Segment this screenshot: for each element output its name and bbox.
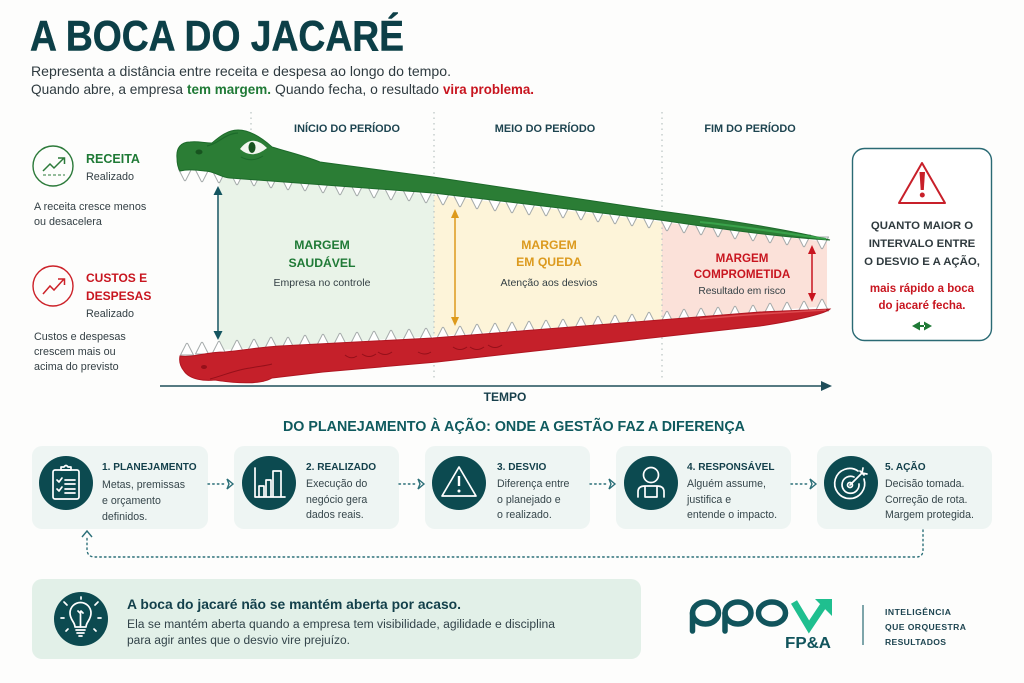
subtitle: vira problema. <box>443 81 534 97</box>
period headers: INÍCIO DO PERÍODO <box>294 122 400 135</box>
zone: margem saudável background <box>219 176 434 350</box>
chart: boca do jacaré <box>160 112 832 404</box>
period dividers <box>251 112 662 380</box>
step 5: ação: Correção de rota. <box>885 494 967 506</box>
icon: person <box>638 468 664 497</box>
label: margem comprometida: MARGEM <box>716 252 768 265</box>
legend: custos e despesas <box>33 266 151 373</box>
panel: takeaway: para agir antes que o desvio vire prejuízo. <box>127 635 350 647</box>
tagline: QUE ORQUESTRA <box>885 622 966 632</box>
legend: custos e despesas: CUSTOS E <box>86 271 147 285</box>
step 2: realizado: 2. REALIZADO <box>306 462 376 473</box>
callout: warning: do jacaré fecha. <box>879 300 965 312</box>
icon: bar chart <box>255 468 285 497</box>
zone: margem em queda background <box>434 195 662 336</box>
step 3: desvio: 3. DESVIO <box>497 462 547 473</box>
subtitle: tem margem. <box>187 81 271 97</box>
legend: receita <box>33 146 147 228</box>
label: margem saudável: SAUDÁVEL <box>288 255 356 270</box>
arrow: feedback loop from ação to planejamento <box>82 530 923 557</box>
tagline: INTELIGÊNCIA <box>885 606 951 617</box>
arrow: step 1 to 2 <box>208 479 233 489</box>
legend: receita: A receita cresce menos <box>34 201 147 213</box>
legend: receita: Realizado <box>86 171 134 183</box>
step 5: ação: Decisão tomada. <box>885 478 964 490</box>
legend: custos e despesas: DESPESAS <box>86 289 151 303</box>
subtitle: Quando fecha, o resultado <box>275 81 439 97</box>
upper jaw: green crocodile head <box>177 130 830 240</box>
step 4: responsável: 4. RESPONSÁVEL <box>687 460 775 473</box>
panel: takeaway <box>32 579 641 659</box>
label: margem em queda <box>501 238 597 289</box>
step 1: planejamento: Metas, premissas <box>102 479 185 491</box>
step 1: planejamento <box>32 446 208 529</box>
label: margem saudável: MARGEM <box>294 238 350 252</box>
time axis: TEMPO <box>484 390 526 404</box>
label: margem comprometida <box>694 252 791 297</box>
arrow: step 4 to 5 <box>791 479 816 489</box>
step 2: realizado: negócio gera <box>306 494 367 506</box>
arrow: margem comprometida gap <box>808 245 816 302</box>
callout: warning: QUANTO MAIOR O <box>871 220 973 232</box>
icon: converging arrows <box>912 322 932 330</box>
step 3: desvio: o planejado e <box>497 494 561 506</box>
arrow: margem em queda gap <box>451 209 459 326</box>
step 2: realizado <box>234 446 399 529</box>
callout: warning: O DESVIO E A AÇÃO, <box>864 255 980 268</box>
title: A BOCA DO JACARÉ <box>30 12 404 60</box>
step 1: planejamento: 1. PLANEJAMENTO <box>102 462 197 473</box>
label: margem saudável: Empresa no controle <box>274 277 371 289</box>
tagline: RESULTADOS <box>885 637 946 647</box>
step 2: realizado: Execução do <box>306 478 367 490</box>
label: margem comprometida: Resultado em risco <box>698 286 786 297</box>
subtitle: Quando abre, a empresa <box>31 81 183 97</box>
lower teeth <box>180 299 828 355</box>
callout: warning: mais rápido a boca <box>870 283 975 295</box>
section heading: DO PLANEJAMENTO À AÇÃO: ONDE A GESTÃO FAZ A DIFERENÇA <box>283 417 746 435</box>
step 2: realizado: dados reais. <box>306 509 364 521</box>
step 4: responsável: entende o impacto. <box>687 509 777 521</box>
legend: custos e despesas: crescem mais ou <box>34 346 116 358</box>
arrow: step 3 to 4 <box>590 479 615 489</box>
icon: warning <box>442 467 476 496</box>
lower jaw: red crocodile jaw <box>180 309 830 383</box>
step 4: responsável: Alguém assume, <box>687 478 766 490</box>
legend: custos e despesas: Custos e despesas <box>34 331 126 343</box>
panel: takeaway: A boca do jacaré não se mantém aberta por acaso. <box>127 596 461 612</box>
label: margem em queda: MARGEM <box>521 238 577 252</box>
panel: takeaway: Ela se mantém aberta quando a empresa tem visibilidade, agilidade e disciplina <box>127 619 556 631</box>
icon: light bulb <box>61 597 101 636</box>
step 1: planejamento: definidos. <box>102 511 147 523</box>
subtitle <box>31 63 534 97</box>
step 5: ação <box>817 446 992 529</box>
callout: warning: INTERVALO ENTRE <box>869 238 976 250</box>
icon: target <box>835 468 867 498</box>
legend: receita: ou desacelera <box>34 216 102 228</box>
step 4: responsável <box>616 446 791 529</box>
legend: custos e despesas: Realizado <box>86 308 134 320</box>
legend: receita: RECEITA <box>86 152 140 166</box>
subtitle: Representa a distância entre receita e despesa ao longo do tempo. <box>31 63 451 79</box>
upper teeth <box>178 169 828 249</box>
arrow: margem saudável gap <box>214 186 222 340</box>
label: margem saudável <box>274 238 371 289</box>
step 3: desvio: o realizado. <box>497 509 552 521</box>
arrow: step 2 to 3 <box>399 479 424 489</box>
legend: custos e despesas: acima do previsto <box>34 361 119 373</box>
logo: PPOV FP&A: FP&A <box>785 635 831 652</box>
logo: PPOV FP&A <box>692 599 832 652</box>
label: margem comprometida: COMPROMETIDA <box>694 268 791 281</box>
tagline <box>885 606 966 647</box>
period headers <box>294 122 796 135</box>
label: margem em queda: Atenção aos desvios <box>501 277 597 289</box>
step 5: ação: Margem protegida. <box>885 509 974 521</box>
step 4: responsável: justifica e <box>686 494 731 506</box>
zone: margem comprometida background <box>662 222 827 320</box>
period headers: MEIO DO PERÍODO <box>495 122 596 135</box>
label: margem em queda: EM QUEDA <box>516 255 582 269</box>
icon: warning triangle <box>899 163 945 203</box>
time axis <box>160 381 832 404</box>
callout: warning <box>852 148 992 340</box>
logo divider <box>862 605 864 645</box>
step 1: planejamento: e orçamento <box>102 495 161 507</box>
icon: clipboard <box>53 466 79 499</box>
step 3: desvio: Diferença entre <box>497 478 570 490</box>
period headers: FIM DO PERÍODO <box>704 122 796 135</box>
step 5: ação: 5. AÇÃO <box>885 460 926 473</box>
step 3: desvio <box>425 446 590 529</box>
